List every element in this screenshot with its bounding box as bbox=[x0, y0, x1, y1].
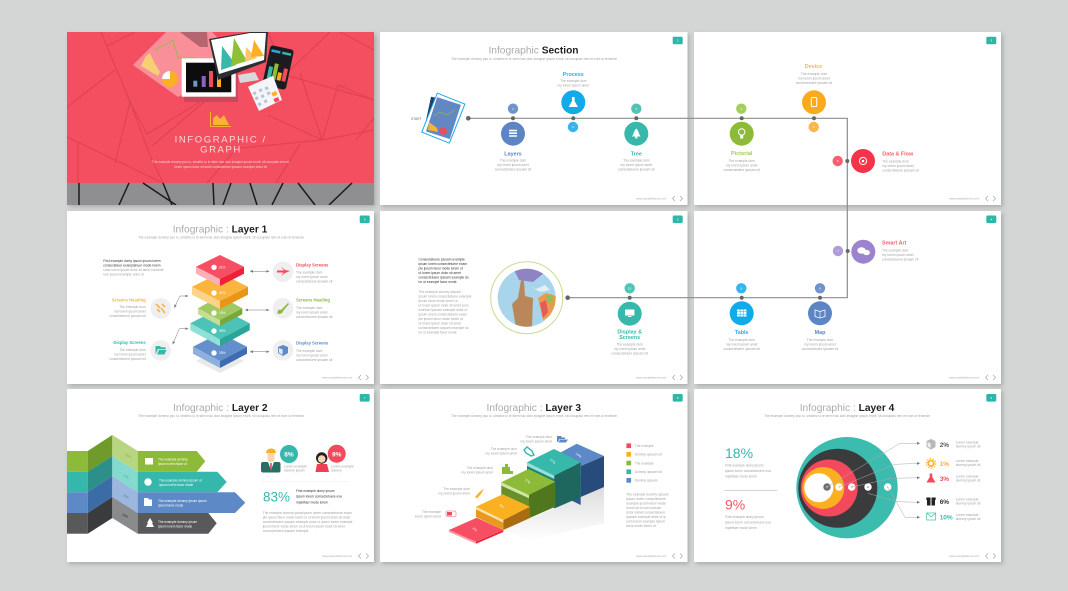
body text: lorem sit ut lorem ipsum bbox=[626, 506, 662, 510]
slide title: Infographic Section bbox=[488, 46, 579, 56]
page badge: 2 bbox=[677, 39, 679, 43]
node: tree: The example dum bbox=[623, 158, 650, 162]
node: map: Map bbox=[815, 330, 826, 336]
footer: www.examplethemes.com bbox=[636, 376, 666, 380]
stair labels bbox=[415, 435, 552, 518]
page badge: 6 bbox=[364, 218, 366, 222]
ribbon: dark: 23% bbox=[122, 512, 129, 519]
panel: smart art slide bbox=[694, 211, 1001, 384]
timeline path bbox=[468, 118, 847, 298]
item: 6% gift: 6% bbox=[940, 499, 949, 506]
node: tree: 3 bbox=[635, 107, 637, 111]
item: 2% cube: 2% bbox=[940, 442, 949, 449]
footer: www.examplethemes.com bbox=[636, 554, 666, 558]
intro text: ut lorem ipsum dolor sit amet bbox=[418, 271, 461, 275]
node: map: 8 bbox=[819, 286, 821, 290]
stat: 18%: ipsum lorem consectetuere exa bbox=[725, 469, 771, 473]
slide subtitle: The example dummy psu io, simsthc io ie stem hac clan imagine ipsum erorit, sit occupatu rem et eum ut tenende bbox=[138, 414, 304, 418]
stat: 83%: mpletfaer mode lorem bbox=[296, 500, 328, 504]
stat: 9%: 9% bbox=[725, 496, 745, 512]
legend: The example bbox=[635, 444, 654, 448]
footer bbox=[636, 375, 682, 380]
body text: dolor samet consectetuere bbox=[626, 510, 665, 514]
page badge: 4 bbox=[990, 218, 992, 222]
intro text: ipsum favor mode lorem ut bbox=[418, 299, 458, 303]
stair icons bbox=[446, 436, 568, 516]
layer: teal 35%: 35% bbox=[219, 329, 226, 333]
item: 10% mail: dummy ipsum sit bbox=[956, 517, 981, 521]
node: smart art: Smart Art bbox=[882, 240, 907, 246]
stair labels: my lorem ipsum amet bbox=[461, 470, 493, 474]
legend: Dummy ipsuam bbox=[635, 479, 658, 483]
node: device: Device bbox=[805, 64, 822, 70]
stat: 83% bbox=[262, 481, 350, 504]
chart: nested circles: 5 bbox=[826, 485, 828, 489]
intro text: ectetuer ipsuam example dolor ut bbox=[418, 308, 467, 312]
intro text: lor ut example favor mode bbox=[418, 280, 457, 284]
ribbon: dark bbox=[67, 497, 217, 534]
item: 10% mail bbox=[927, 513, 981, 522]
start dot bbox=[466, 116, 471, 121]
node: tree: Tree bbox=[631, 152, 642, 158]
page badge bbox=[673, 37, 683, 44]
icon: plane bbox=[273, 261, 293, 282]
right labels: Screens Heading bbox=[296, 298, 330, 302]
slide title: Infographic : Layer 1 bbox=[173, 224, 268, 236]
layer: orange 30%: 30% bbox=[219, 291, 226, 295]
chart: nested circles: 2 bbox=[867, 485, 869, 489]
icon: brush bbox=[273, 298, 293, 319]
stair labels: lorem ipsum amet bbox=[415, 514, 441, 518]
icon: cube bbox=[273, 340, 293, 361]
node: process bbox=[558, 72, 589, 132]
ribbon: blue: The example dummy ipsum ipsum bbox=[158, 499, 207, 503]
illustration: calculator bbox=[248, 76, 282, 111]
node: smart art: The example dum bbox=[882, 248, 909, 252]
node: device bbox=[796, 64, 832, 132]
page badge bbox=[360, 216, 370, 223]
image: globe with hand bbox=[491, 262, 563, 334]
right labels: Display Screens bbox=[296, 262, 329, 268]
item: 10% mail: 10% bbox=[940, 514, 953, 522]
callout: 9%: Lorem example bbox=[331, 464, 354, 468]
node: smart art: 7 bbox=[837, 249, 839, 253]
node: tree: my lorem ipsum amet bbox=[621, 163, 652, 167]
start label: START bbox=[411, 117, 422, 121]
stair labels: The example bbox=[422, 510, 441, 514]
step: teal 27%: 27% bbox=[549, 458, 556, 465]
item: 2% cube: Lorem example bbox=[956, 440, 979, 444]
node: pictorial: consectetuere ipsuam sit bbox=[723, 168, 760, 172]
stat: 18%: mpletfaer mode lorem bbox=[725, 474, 757, 478]
left labels: The example dum bbox=[119, 305, 146, 309]
item: 2% cube: dummy ipsum sit bbox=[956, 444, 981, 448]
callout lines bbox=[827, 443, 920, 517]
step: blue 14%: 14% bbox=[575, 452, 582, 459]
node: map: my lorem ipsum amet bbox=[804, 342, 836, 346]
right labels: The example dum bbox=[296, 349, 323, 353]
body text: ipsum lorem consectetuere bbox=[626, 497, 666, 501]
page badge: 5 bbox=[677, 218, 679, 222]
stat: 9%: First example dumy ipsum bbox=[725, 515, 764, 519]
page badge bbox=[986, 216, 996, 223]
left labels: The example dum bbox=[119, 348, 146, 352]
slide title: Infographic : Layer 2 bbox=[173, 403, 268, 414]
node: display and screens: Display & bbox=[617, 330, 642, 336]
intro text: consectetuere ipsuam example do bbox=[418, 326, 469, 330]
right labels bbox=[296, 262, 333, 362]
page badge bbox=[673, 216, 683, 223]
slide title: Infographic : Layer 4 bbox=[800, 403, 895, 414]
stair labels: my lorem ipsum amet bbox=[520, 440, 552, 444]
body text: ipsum favor mode lorem ut ut lorem ipsum dolor sit amet bbox=[263, 524, 345, 528]
footer: www.examplethemes.com bbox=[949, 554, 979, 558]
item: 1% gear bbox=[926, 458, 981, 468]
ribbon: teal: The example dummy ipsum ut bbox=[159, 478, 202, 482]
illustration: report sheet bbox=[133, 32, 218, 97]
node: data and flow: The example dum bbox=[882, 160, 909, 164]
node: layers: Layers bbox=[504, 152, 522, 158]
node: process: Process bbox=[563, 72, 584, 78]
node: tree bbox=[618, 104, 655, 172]
body text: example ipsum favor mode bbox=[626, 502, 666, 506]
chart: isometric stairs bbox=[449, 444, 604, 544]
item: 3% flask: dummy ipsum sit bbox=[956, 478, 981, 482]
item: 3% flask: 3% bbox=[940, 476, 949, 483]
node: table: 9 bbox=[740, 286, 742, 290]
step: red 2% bbox=[449, 518, 503, 544]
legend: Dummy ipsuam sit bbox=[635, 470, 662, 474]
footer: www.examplethemes.com bbox=[949, 376, 979, 380]
icon: documents bbox=[422, 93, 465, 143]
right labels: consectetuere ipsuam sit bbox=[296, 358, 333, 362]
body text bbox=[626, 492, 669, 528]
intro text: First example dumy ipsum ipsum lorem bbox=[103, 259, 161, 263]
panel: layer 3 slide bbox=[380, 389, 688, 562]
intro text: consectetuere ipsuam example do bbox=[418, 276, 469, 280]
callout: 9%: dummy bbox=[331, 468, 342, 472]
slide shadows bbox=[69, 34, 1003, 564]
item: 1% gear: dummy ipsum sit bbox=[956, 463, 981, 467]
footer: www.examplethemes.com bbox=[636, 196, 666, 200]
left labels: consectetuere ipsuam sit bbox=[109, 314, 146, 318]
body text: consectetuere ipsuam example bbox=[263, 529, 308, 533]
node: pictorial: my lorem ipsum amet bbox=[726, 164, 758, 168]
panel: layer 2 slide bbox=[67, 389, 374, 562]
step: teal 27% bbox=[527, 449, 581, 508]
item: 6% gift: dummy ipsum sit bbox=[956, 502, 981, 506]
body text: sum lorem example ipsum bbox=[626, 520, 665, 524]
callout: 8%: dummy ipsum bbox=[284, 468, 305, 472]
node: process: 2 bbox=[572, 125, 574, 129]
node: pictorial bbox=[723, 104, 760, 172]
body text: The example dummy ipsumipsum lorem consectetuere exam bbox=[263, 511, 352, 515]
right labels: The example dum bbox=[296, 270, 323, 274]
item: 1% gear: 1% bbox=[940, 461, 949, 468]
node: tree: consectetuere ipsuam sit bbox=[618, 168, 655, 172]
stat: 18%: 18% bbox=[725, 445, 753, 461]
node: data and flow: consectetuere ipsuam sit bbox=[882, 168, 919, 172]
ribbon: dark: The example dummy ipsum bbox=[158, 520, 197, 524]
right labels: consectetuere ipsuam sit bbox=[296, 315, 333, 319]
legend: Dummy ipsuam sit bbox=[635, 453, 662, 457]
footer bbox=[949, 375, 996, 380]
page badge bbox=[673, 394, 683, 402]
footer bbox=[636, 196, 682, 201]
page badge: 3 bbox=[990, 39, 992, 43]
left labels: Display Screens bbox=[113, 340, 146, 345]
panel: globe slide bbox=[380, 211, 688, 384]
node: map bbox=[802, 283, 838, 351]
node: data and flow: my lorem ipsum amet bbox=[882, 164, 914, 168]
node: display and screens: Screens bbox=[619, 335, 640, 341]
intro text: ut lorem ipsum dolor sit amet bbox=[418, 322, 461, 326]
ribbon: blue: ipsum favor mode bbox=[158, 504, 184, 508]
node: layers bbox=[495, 104, 531, 172]
node: smart art: my lorem ipsum amet bbox=[882, 253, 914, 257]
stat: 83%: First example dumy ipsum bbox=[296, 489, 335, 493]
chart: nested circles bbox=[796, 437, 898, 538]
intro text bbox=[418, 258, 472, 334]
node: data and flow: 6 bbox=[837, 159, 839, 163]
intro text: ple ipsum favor mode lorem ut bbox=[418, 266, 463, 270]
stat: 9%: mpletfaer mode lorem bbox=[725, 526, 757, 530]
node: display and screens: consectetuere ipsuam sit bbox=[611, 352, 648, 356]
intro text: ipsum lorem consectetuere exam bbox=[418, 262, 467, 266]
body text: ple ipsum favor mode lorem ut ut lorem ipsum dolor sit amet bbox=[263, 516, 350, 520]
intro text: ple ipsum favor mode lorem ut bbox=[418, 317, 463, 321]
cover subtitle: lorem ipsum dolor sit amet consectetuer ipsuam example dolor sit bbox=[174, 165, 267, 169]
stat: 83%: ipsum lorem consectetuere exa bbox=[296, 494, 342, 498]
panel: layer 4 slide bbox=[694, 389, 1001, 562]
end dot bbox=[565, 295, 570, 300]
right labels: my lorem ipsum amet bbox=[296, 275, 328, 279]
item: 3% flask bbox=[926, 474, 981, 483]
step: green 17% bbox=[501, 469, 555, 518]
step: red 2%: 2% bbox=[472, 526, 478, 532]
layer: red 21%: 21% bbox=[219, 266, 226, 270]
panel: cover slide bbox=[67, 32, 374, 205]
node: layers: consectetuere ipsuam sit bbox=[495, 168, 531, 172]
intro text: The example dummy ipsuam bbox=[418, 290, 461, 294]
legend: The example bbox=[635, 461, 654, 465]
ribbon: blue bbox=[67, 476, 245, 513]
slide title: Infographic : Layer 3 bbox=[487, 403, 581, 414]
ribbon: dark: ipsum lorem favor mode bbox=[158, 524, 192, 528]
node: device: my lorem ipsum amet bbox=[798, 76, 830, 80]
callout: 8%: 8% bbox=[284, 452, 294, 459]
body text: ipsuam example dolor ut ip bbox=[626, 515, 666, 519]
illustration: framed bar chart bbox=[182, 58, 238, 102]
icon: area chart bbox=[210, 112, 231, 126]
ribbon: teal bbox=[67, 456, 227, 492]
page badge: 7 bbox=[364, 396, 366, 400]
stat: 18%: First example dumy ipsum bbox=[725, 464, 764, 468]
item: 6% gift: Lorem example bbox=[956, 498, 979, 502]
left labels: consectetuere ipsuam sit bbox=[109, 357, 146, 361]
ribbon: teal: ipsum lorem favor mode bbox=[159, 483, 193, 487]
left labels: my lorem ipsum amet bbox=[114, 310, 146, 314]
node: map: consectetuere ipsuam sit bbox=[802, 347, 838, 351]
left labels bbox=[109, 298, 146, 361]
cover subtitle: The example dummy psu io, simsthc io ie stem hac clan imagine ipsum erorit, sit occupatu rem et bbox=[152, 160, 289, 164]
right labels: The example dum bbox=[296, 306, 323, 310]
legend bbox=[626, 443, 662, 483]
slide subtitle: The example dummy psu io, simsthc io ie stem hac clan imagine ipsum erorit, sit occupatu rem et eum ut tenende bbox=[451, 57, 617, 61]
callout: 9%: 9% bbox=[332, 451, 342, 458]
callout: 8% bbox=[280, 445, 307, 472]
node: table: my lorem ipsum amet bbox=[726, 342, 758, 346]
ribbon: green: 21% bbox=[125, 452, 132, 459]
stair labels: The example dum bbox=[491, 447, 517, 451]
right labels: my lorem ipsum amet bbox=[296, 310, 328, 314]
panel: layer 1 slide bbox=[67, 211, 374, 384]
stair labels: The example dum bbox=[526, 435, 552, 439]
illustration: phone bbox=[262, 45, 294, 90]
node: table: Table bbox=[735, 330, 749, 336]
step: orange 6%: 6% bbox=[499, 503, 505, 509]
node: device: consectetuere ipsuam sit bbox=[796, 81, 832, 85]
footer bbox=[949, 554, 996, 558]
cover subtitle bbox=[152, 160, 289, 169]
chart: nested circles: 4 bbox=[838, 485, 840, 489]
layer: green 15%: 15% bbox=[219, 311, 226, 315]
item: 6% gift bbox=[926, 497, 981, 506]
ribbon: green: ipsum lorem favor ut bbox=[158, 462, 187, 466]
intro text: ipsum lorem consectetuere exam bbox=[418, 312, 467, 316]
chart: nested circles: 3 bbox=[851, 485, 853, 489]
ribbon: green: The example dummy bbox=[158, 458, 188, 462]
callout: 9% bbox=[328, 445, 354, 472]
node: data and flow bbox=[832, 149, 919, 173]
cover title second line: GRAPH bbox=[200, 144, 242, 156]
footer bbox=[949, 196, 996, 201]
right labels: my lorem ipsum amet bbox=[296, 354, 328, 358]
item: 3% flask: Lorem example bbox=[956, 474, 979, 478]
panel: device slide bbox=[694, 32, 1001, 205]
node: data and flow: Data & Flow bbox=[882, 152, 914, 158]
node: smart art: consectetuere ipsuam sit bbox=[882, 258, 919, 262]
node: device: 5 bbox=[813, 125, 815, 129]
intro text: Consectetuere ipsuam example bbox=[418, 258, 465, 262]
icon: link bbox=[150, 298, 171, 319]
node: process: my lorem ipsum amet bbox=[558, 84, 589, 88]
step: orange 6% bbox=[476, 494, 530, 530]
node: map: The example dum bbox=[807, 338, 833, 342]
page badge bbox=[360, 394, 370, 402]
node: device: The example dum bbox=[801, 72, 827, 76]
item: 10% mail: Lorem example bbox=[956, 513, 979, 517]
body text: consectetuere ipsuam example dolor ut ipsum lorem example bbox=[263, 520, 353, 524]
item: 2% cube bbox=[926, 439, 981, 450]
icon: woman bbox=[316, 452, 329, 472]
node: display and screens: my lorem ipsum amet bbox=[614, 347, 646, 351]
node: table: consectetuere ipsuam sit bbox=[723, 347, 760, 351]
intro text: lor ut example favor mode bbox=[418, 330, 457, 334]
intro text: ut lorem ipsum dolor sit amet cons bbox=[418, 304, 469, 308]
stair labels: The example dum bbox=[443, 487, 470, 491]
footer bbox=[322, 554, 368, 558]
item: 1% gear: Lorem example bbox=[956, 459, 979, 463]
node: display and screens bbox=[611, 283, 648, 356]
icon: folder bbox=[150, 340, 171, 361]
stair labels: my lorem ipsum amet bbox=[485, 452, 517, 456]
ribbon: blue: 25% bbox=[122, 493, 130, 500]
left labels: Screens Heading bbox=[112, 298, 146, 302]
stair labels: The example dum bbox=[467, 466, 493, 470]
page badge: 8 bbox=[677, 396, 679, 400]
body text: The example dummy ipsuam bbox=[626, 492, 669, 496]
node: display and screens: The example dum bbox=[617, 342, 643, 346]
body text: favor mode lorem ut bbox=[626, 524, 656, 528]
stat: 18% bbox=[725, 445, 771, 478]
intro text: ipsum lorem consectetuere example bbox=[418, 294, 472, 298]
chart: layered stack bbox=[190, 255, 250, 373]
right labels: Display Screens bbox=[296, 340, 329, 346]
footer: www.examplethemes.com bbox=[322, 554, 352, 558]
ribbon: teal: 17% bbox=[122, 473, 130, 480]
ribbon: green bbox=[67, 435, 205, 472]
node: pictorial: Pictorial bbox=[731, 151, 753, 157]
step: green 17%: 17% bbox=[524, 478, 531, 485]
cover title: INFOGRAPHIC / bbox=[175, 134, 267, 146]
intro text: Unar lorem ipsum dolor sit amet conserte bbox=[103, 268, 164, 272]
panel: infographic section slide bbox=[380, 32, 688, 205]
node: layers: 1 bbox=[512, 107, 514, 111]
chart: nested circles: 1 bbox=[887, 485, 889, 489]
footer bbox=[636, 554, 682, 558]
node: pictorial: The example dum bbox=[729, 159, 755, 163]
node: process: The example dum bbox=[560, 79, 587, 83]
intro text bbox=[103, 259, 164, 276]
node: smart art bbox=[833, 240, 919, 264]
page badge bbox=[986, 394, 996, 402]
footer: www.examplethemes.com bbox=[322, 376, 352, 380]
stat: 83%: 83% bbox=[263, 490, 290, 504]
illustration: monitor bbox=[209, 32, 268, 83]
stair labels: my lorem ipsum amet bbox=[438, 492, 470, 496]
slide subtitle: The example dummy psu io, simsthc io ie stem hac clan imagine ipsum erorit, sit occupatu rem et eum ut tenende bbox=[138, 236, 304, 240]
arrows bbox=[173, 271, 269, 352]
page badge bbox=[986, 37, 996, 44]
slide subtitle: The example dummy psu io, simsthc io ie stem hac clan imagine ipsum erorit, sit occupatu rem et eum ut tenende bbox=[764, 414, 930, 418]
chart: folded ribbon arrows bbox=[67, 435, 245, 534]
footer: www.examplethemes.com bbox=[949, 196, 979, 200]
step: blue 14% bbox=[554, 444, 604, 505]
node: display and screens: 10 bbox=[628, 286, 632, 290]
node: table: The example dum bbox=[729, 338, 755, 342]
right labels: consectetuere ipsuam sit bbox=[296, 280, 333, 284]
footer bbox=[322, 375, 368, 380]
intro text: lure ipsum example dolor ut bbox=[103, 272, 144, 276]
stat: 9% bbox=[724, 490, 777, 530]
node: pictorial: 4 bbox=[740, 107, 742, 111]
layer: blue 25%: 25% bbox=[219, 351, 226, 355]
body text bbox=[263, 511, 353, 533]
node: table bbox=[723, 283, 760, 351]
node: layers: my lorem ipsum amet bbox=[497, 163, 529, 167]
intro text: consectetuer examplehuer mode lorem bbox=[103, 264, 161, 268]
stat: 9%: ipsum lorem consectetuere exa bbox=[725, 520, 771, 524]
slide subtitle: The example dummy psu io, simsthc io ie stem hac clan imagine ipsum erorit, sit occupatu rem et eum ut tenende bbox=[451, 414, 617, 418]
page badge: 9 bbox=[990, 396, 992, 400]
callout: 8%: Lorem example bbox=[284, 464, 307, 468]
icon: businessman bbox=[261, 448, 280, 472]
left labels: my lorem ipsum amet bbox=[114, 352, 146, 356]
node: layers: The example dum bbox=[500, 158, 526, 162]
